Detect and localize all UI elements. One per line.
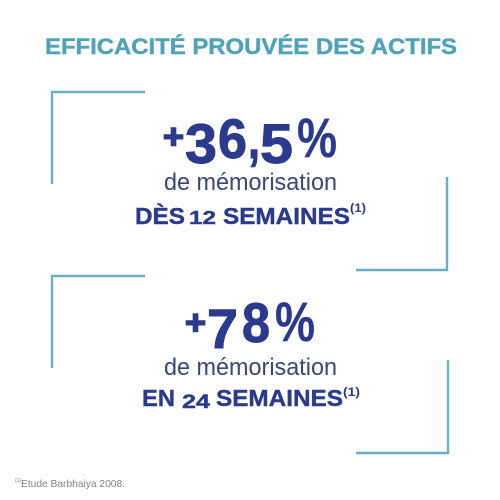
label: en 24 semaines: EN: [142, 385, 175, 411]
stat: +78%: %: [275, 290, 315, 353]
label: de mémorisation: de mémorisation: [164, 169, 337, 196]
label: en 24 semaines: (1): [343, 385, 360, 399]
bracket: bottom right: [356, 360, 448, 453]
stat: +36,5%: 3: [185, 112, 217, 175]
panel: 12 weeks stat: [52, 92, 447, 270]
label: en 24 semaines: 24: [182, 392, 211, 413]
stat: +36,5%: ,: [248, 107, 260, 170]
stat: +36,5%: +: [163, 118, 184, 156]
stat: +78%: 7: [207, 297, 238, 360]
footnote: Etude Barbhaiya 2008.: [21, 478, 125, 490]
stat: +78%: [185, 290, 315, 360]
bracket: bottom right: [356, 177, 447, 270]
stat: +78%: 8: [242, 291, 270, 354]
stat: +36,5%: 6: [218, 107, 247, 170]
stat: +78%: +: [185, 304, 206, 342]
label: en 24 semaines: SEMAINES: [216, 385, 343, 411]
label: de mémorisation: de mémorisation: [164, 354, 337, 381]
panel: 24 weeks stat: [52, 276, 448, 453]
title: EFFICACITÉ PROUVÉE DES ACTIFS: [45, 34, 457, 59]
bracket: top left: [52, 92, 145, 184]
label: en 24 semaines: [142, 385, 360, 413]
label: dès 12 semaines: 12: [189, 208, 216, 228]
label: dès 12 semaines: SEMAINES: [223, 203, 350, 229]
stat: +36,5%: %: [297, 106, 337, 169]
stat: +36,5%: 5: [260, 112, 293, 175]
footnote: (1): [15, 478, 21, 484]
label: dès 12 semaines: DÈS: [135, 202, 185, 229]
stat: +36,5%: [163, 106, 337, 175]
label: dès 12 semaines: [135, 201, 366, 229]
label: dès 12 semaines: (1): [350, 201, 366, 215]
bracket: top left: [52, 276, 145, 368]
